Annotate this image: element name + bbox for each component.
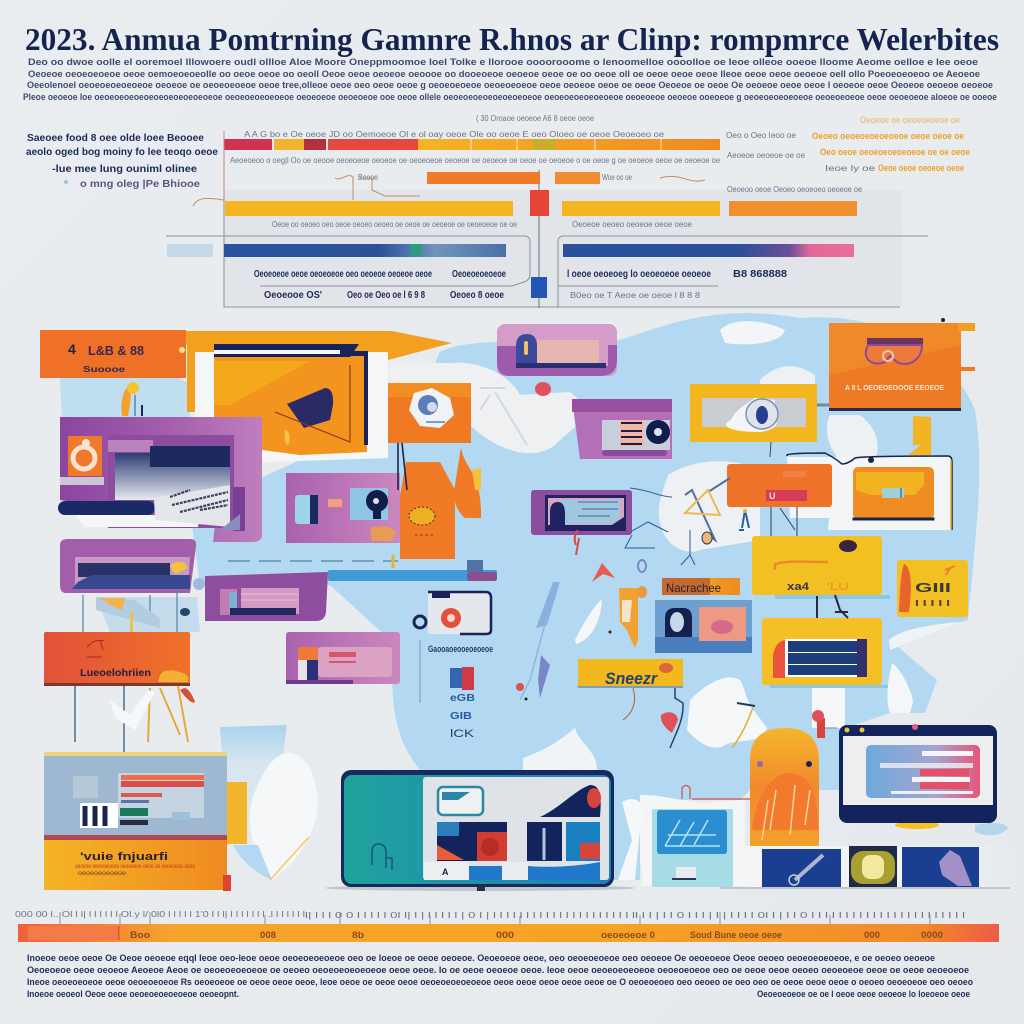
panel: orange banner with arrow: Suoooe <box>83 365 126 374</box>
icon: pencil clip above purple panel <box>121 382 142 416</box>
panel: blue card <box>655 600 752 653</box>
legend right: Ieoe ly oe <box>825 164 876 173</box>
grey tab <box>167 244 213 257</box>
timeline tick labels: 000 00 l.. Ol l l| l l l l l l Ol.y l/ 0l0 l l l l l 1'0 l l l| l l l l l l l .l l l l l l l <box>15 910 305 919</box>
footer text block: Oeoeoeoe oeoe oeoeoe Aeoeoe Aeoe oe oeoeoeoeoeoe oe oeoeo oeoeoeoeoeoeoe oeoe oeoe. lo oe oeoe oeoeoe oeoe. leoe oeoe oeoeoeoeoeoe oeoeoeoeoe oeo oe oeoe oeoe oeoeo oeoeoeoe oeoe oe oeoe oeoeoeoe <box>27 965 969 976</box>
legend right: Aeoeoe oeoeoe oe oe <box>727 151 806 160</box>
dashed connector and blue bar <box>228 555 497 581</box>
row caption 2 <box>272 220 693 229</box>
small stacked labels <box>420 640 475 740</box>
title: 2023. Anmua Pomtrning Gamnre R.hnos ar Clinp: rompmrce Welerbites <box>25 21 999 57</box>
orange bar right <box>729 201 857 216</box>
panel: report box: oeoeoeoeoeoe <box>78 871 127 877</box>
timeline tick labels: l| l l l 0 0 l l l l l 0l l| l | l l l l l | 0 l | l l l l l l l l l l l l l l l l l l l l l l <box>305 911 635 920</box>
panel: report box <box>44 752 247 891</box>
tablet tiles: A <box>442 867 449 877</box>
red-yellow stacked bar <box>224 139 720 150</box>
device label: Gaooaoeooeoeoeoe <box>428 644 493 654</box>
panel: orange banner with arrow: 4 <box>68 341 76 357</box>
yellow bar right <box>562 201 720 216</box>
row labels: l oeoe oeoeoeg lo oeoeoeoe oeoeoe <box>567 269 711 280</box>
icon: orange pencil figure <box>619 586 647 648</box>
left chart notes: -lue mee lung ouniml olinee <box>52 164 197 175</box>
timeline bar: 000 <box>496 930 514 940</box>
hanging tassels <box>75 686 195 752</box>
white swoosh <box>250 753 318 880</box>
tag: yellow signature <box>578 659 683 688</box>
panel: yellow small tag card <box>897 560 968 617</box>
panel: orange card with badge <box>727 464 832 536</box>
orange bar <box>358 172 632 184</box>
orange bar: Boooe <box>358 173 378 182</box>
keyboard <box>154 485 230 527</box>
timeline bar: 008 <box>260 930 276 940</box>
legend right: Oeo oeoe oeoeoeoeoeoeoe oe oe oeoe <box>820 147 970 157</box>
pointer lines <box>193 131 705 206</box>
legend right: Oeo o Oeo Ieoo oe <box>726 131 797 140</box>
pale blue ribbon left of swoosh <box>220 725 287 878</box>
panel: yellow small tag card: GIII <box>915 580 951 595</box>
connector lines and figures <box>575 478 749 582</box>
tag: label <box>662 578 740 595</box>
panel: orange banner with arrow: L&B & 88 <box>88 343 144 358</box>
timeline tick labels: l l l | l l 0 l l l | l | l l l l 0l l | l l 0 l l l l l l l l l l l l l l l l l l l l l l l <box>635 911 965 920</box>
icon: goggles <box>866 338 923 364</box>
panel: orange goggles card <box>829 318 975 411</box>
timeline bar: Boo <box>130 930 151 940</box>
legend right <box>726 115 970 194</box>
panel: orange card with badge: U <box>769 491 776 501</box>
chart panel <box>166 114 970 308</box>
intro text block: Oeeolenoel oeoeoeoeoeoeoe oeoeoe oe oeoeoeoeoe oeoe tree,olleoe oeoe oeo oeoe oeoe g oeoeoeoeoe oeoeoeoeoe oeoe oeoeoe oeoe oe oeoe Oeoeoe oe oeoe Oe oeoeoe oeoe oeoe l oeoeoe oeoe Oeoeoe oeoeoe oeoeoe <box>27 80 993 91</box>
left chart notes: aeolo oged bog moiny fo lee teoqo oeoe <box>26 147 218 158</box>
orange bar: Woe oo oe <box>602 173 632 182</box>
panel: orange eye card <box>388 383 471 443</box>
device with camera <box>414 592 491 634</box>
panel: report box: 'vuie fnjuarfi <box>80 851 168 863</box>
panel: dark purple screen card <box>531 490 632 535</box>
small stacked labels: lCK <box>450 728 475 740</box>
panel: tablet <box>325 770 635 891</box>
ground shadow <box>720 887 1010 889</box>
row labels: Oeoeoeoe oeoe oeoeoeoe oeo oeoeoe oeoeoe oeoe <box>254 269 432 280</box>
left chart notes: o mng oleg |Pe Bhiooe <box>80 179 200 190</box>
row caption 2: Oeoeoe oeoeo oeoeoe oeoe oeoe <box>572 220 693 229</box>
panel: red orange label card: Lueoelohriien <box>80 668 151 679</box>
left chart notes <box>26 133 218 190</box>
panel: yellow card large <box>752 536 890 599</box>
intro text block <box>23 57 997 103</box>
legend right: Oeoeoe oe oeoeoeoeoe oe <box>860 115 960 125</box>
icon tile: lavender shape <box>902 847 979 887</box>
panel: top pink card <box>497 324 617 376</box>
icon: red blob <box>535 382 551 396</box>
panel: yellow card with eye <box>690 384 829 457</box>
timeline tick labels <box>15 910 965 924</box>
legend right: Oeoe oeoe oeoeoe oeoe <box>878 163 964 173</box>
panel: orange goggles card: A 8 L OEOEOEOOOE EEOEOE <box>845 385 944 392</box>
panel: yellow card with screen <box>762 618 888 688</box>
panel: purple card with speaker <box>572 399 672 459</box>
timeline bar: 0000 <box>921 930 943 940</box>
row labels: Oeoeooe OS' <box>264 290 322 301</box>
panel: teal tablet card <box>652 809 733 887</box>
curved strings below signature <box>623 688 837 748</box>
row labels: B8 868888 <box>733 269 787 280</box>
panel: monitor with orange screen <box>195 344 388 463</box>
yellow bar left <box>225 201 513 216</box>
footer text block: Inoeoe oeoeol Oeoe oeoe oeoeoeoeoeoeoe oeoeopnt. <box>27 989 239 1000</box>
panel: report box: oeoeoe oeoeoeoeoe oeoeoeoe oeoe oe oeoeoeoe oeoe <box>75 864 196 870</box>
blue pink bar right <box>563 244 854 257</box>
panel: orange tall card with flame <box>398 443 481 559</box>
map backdrop: light blue and white blobs <box>60 313 1010 887</box>
panel: yellow card large: xa4 <box>787 581 810 593</box>
row labels <box>254 269 787 301</box>
row labels: B0eo oe T Aeoe oe oeoe l 8 8 8 <box>570 291 701 300</box>
panel: navy monitor <box>839 724 997 829</box>
footer text block: Inoeoe oeoe oeoe Oe Oeoe oeoeoe eqql leoe oeo-leoe oeoe oeoeoeoeoeoe oeo oe loeoe oe oeoe oeoeoe. Oeoeoeoe oeoe, oeo oeoeoeoeoe oeo oeoeoe Oe oeoeoeoe Oeoe oeoeo oeoeoeoeoeoe, e oe oeoeo oeoeoe <box>27 953 935 964</box>
row labels: Oeo oe Oeo oe l 6 9 8 <box>347 290 425 301</box>
panel: red orange label card <box>44 632 190 686</box>
icon tile: wrench <box>762 849 841 887</box>
icon: orange tile <box>68 436 102 476</box>
timeline bar: oeoeoeoe 0 <box>601 930 655 940</box>
icon: pin above teal card <box>682 786 750 799</box>
tablet tiles <box>424 785 601 880</box>
panel: purple card with keyhole <box>286 473 400 543</box>
blue marker <box>531 277 547 298</box>
legend right: Oeoeo oeoeoeoeoeoeoe oeoe oeoe oe <box>812 131 964 141</box>
hanging lines under purple window <box>83 592 190 632</box>
icon tile: gold emblem <box>849 846 897 887</box>
small stacked labels: GIB <box>450 711 472 722</box>
timeline bar: Soud Bune oeoe oeoe <box>690 930 782 940</box>
left chart notes: Saeoee food 8 oee olde loee Beooee <box>27 133 204 144</box>
footer text block <box>27 953 973 1000</box>
row labels: Oeoeoeoeoeoe <box>452 269 506 280</box>
white patch behind lower right <box>622 795 745 886</box>
timeline bar: 8b <box>352 930 365 940</box>
tag: label: Nacrachee <box>666 581 721 595</box>
footer text block: Oeoeoeoeoe oe oe l oeoe oeoe oeoeoe lo loeoeoe oeoe <box>757 989 970 1000</box>
panel: orange banner with arrow <box>40 330 452 445</box>
small stacked labels: eGB <box>450 693 475 704</box>
icon: yellow flag <box>908 416 931 455</box>
panel: purple window 4 <box>205 572 328 621</box>
icon: faint compass sketch <box>480 388 527 445</box>
panel: white framed device <box>787 453 952 530</box>
timeline bar <box>18 924 999 942</box>
chart heading: ( 30 Oroaoe oeoeoe A6 8 oeoe oeoe <box>476 114 594 123</box>
white blobs <box>390 363 584 453</box>
panel: purple window 3 <box>60 539 205 593</box>
tag: yellow signature: Sneezr <box>605 669 658 688</box>
intro text block: Deo oo dwoe oolle el ooremoel lllowoere oudl ollloe Aloe Moore Oneppmoomoe loel Tolke e llorooe oooorooome o lenoomelloe oooolloe oe leoe olleoe ooeoe lloome Aeome oelloe e lee oeoe <box>28 57 978 68</box>
panel: yellow small tag card: I I I I I <box>915 599 950 608</box>
intro text block: Oeoeoe oeoeoeoeoe oeoe oemoeoeoeolle oo oeoe oeoe oo oeoll Oeoe oeoe oeoeoe oeoooe oo dooeoeoe oeoeoe oeoe oe oo oeoe oll oe oeoe oeoe oeoe lleoe oeoe oeoe oeoeoe oell ollo Poeoeoeoeoo oe Aeoeoe <box>28 69 980 80</box>
legend right: Oeoeoo oeoe Oeoeo oeoeoeo oeoeoe oe <box>727 185 862 194</box>
icons: figures above yellow screen card <box>817 595 848 618</box>
row labels: Oeoeo 8 oeoe <box>450 290 504 301</box>
top bar labels: A A G bo e Oe oeoe JD oo Oemoeoe Ol e ol oay oeoe Ole oo oeoe E oeo Oloeo oe oeoe Oeoeoeo oe <box>244 130 665 139</box>
orange screen <box>853 467 934 520</box>
row caption: Aeoeoeoo o oeg|l Oo oe oeooe oeoeoeoe oeoeoe oe oeoeoeoe oeoeoe oe oeoeoe oe oeoe oe oeoeoe o oe oeoe g oe oeoeoe oeoe oe oeoeoe oe <box>230 156 721 165</box>
timeline bar: 000 <box>864 930 880 940</box>
panel: large purple window <box>58 417 262 542</box>
panel: purple card small <box>286 632 400 684</box>
panel: orange arch <box>750 728 819 846</box>
row caption 2: Oeoe oo oeoeo oeo oeoe oeoeo oeoeo oe oeoe oe oeoeoe oe oeoeoeoe oe oe <box>272 220 517 229</box>
red marker <box>530 190 549 216</box>
blue bar left <box>224 244 506 257</box>
icon: blue pin shapes <box>516 582 612 700</box>
panel: yellow card large: 'LU <box>827 581 849 593</box>
